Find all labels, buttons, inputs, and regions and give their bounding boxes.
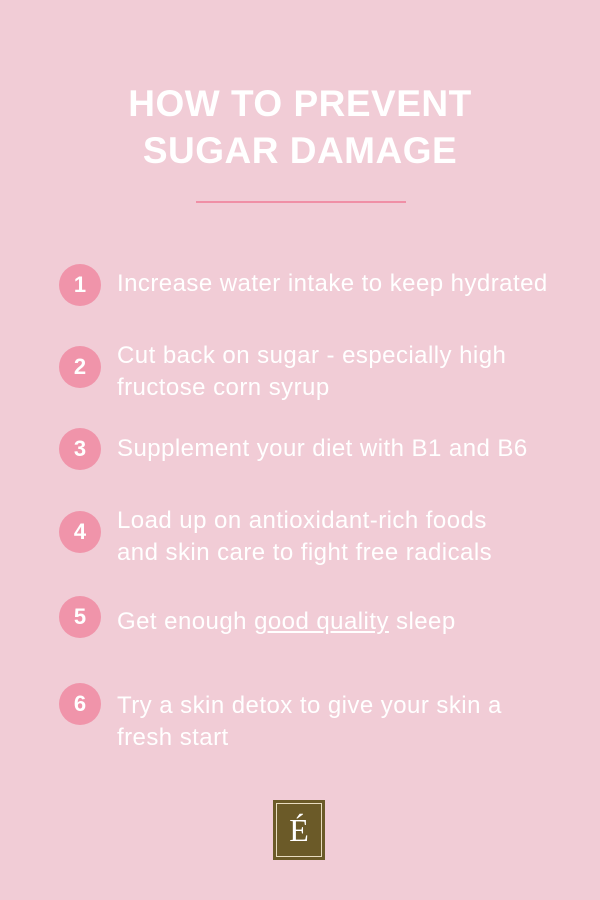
text: Try a skin detox to give your skin a (117, 692, 502, 719)
step 4 (59, 507, 492, 566)
title: SUGAR DAMAGE (143, 130, 457, 171)
title: HOW TO PREVENT (128, 83, 472, 124)
text: fresh start (117, 724, 229, 751)
text: and skin care to fight free radicals (117, 539, 492, 566)
text: Load up on antioxidant-rich foods (117, 507, 487, 534)
text: 3 (74, 436, 86, 461)
text: fructose corn syrup (117, 374, 330, 401)
divider (196, 201, 406, 203)
text: 1 (74, 272, 86, 297)
step 1 (59, 264, 548, 306)
step 6 (59, 683, 502, 751)
text: Get enough good quality sleep (117, 608, 456, 635)
step 3 (59, 428, 528, 470)
title (128, 83, 472, 171)
text: 6 (74, 691, 86, 716)
step 2 (59, 342, 506, 401)
text: 5 (74, 604, 86, 629)
text: 2 (74, 354, 86, 379)
text: Cut back on sugar - especially high (117, 342, 506, 369)
text: Increase water intake to keep hydrated (117, 270, 548, 297)
text: 4 (74, 519, 86, 544)
logo: É (289, 812, 309, 848)
step 5 (59, 596, 456, 638)
text: Supplement your diet with B1 and B6 (117, 435, 528, 462)
logo (273, 800, 325, 860)
